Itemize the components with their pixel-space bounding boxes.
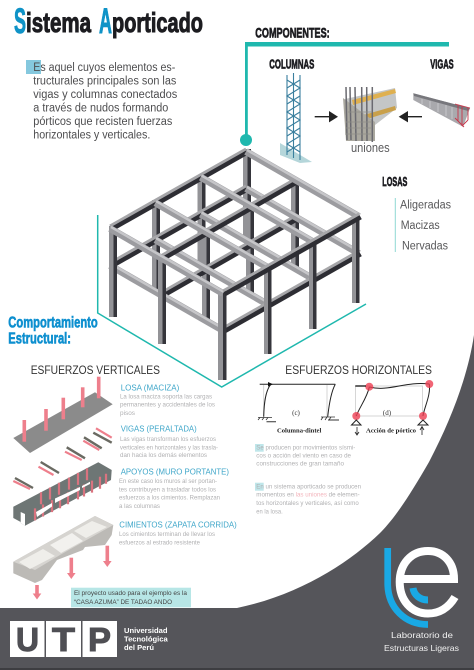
intro paragraph — [26, 60, 178, 142]
teal frame base outline — [98, 215, 366, 387]
diagram: column-lintel frame (c): (c) — [292, 409, 301, 417]
text block: vigas — [120, 425, 218, 459]
lower level beams — [110, 186, 361, 331]
intro paragraph: tructurales principales son las — [33, 76, 177, 88]
university name — [124, 626, 169, 652]
title: porticado — [112, 7, 203, 38]
heading: comportamiento estructural: Comportamiento — [8, 314, 98, 331]
illustration: beams with force arrows — [13, 428, 112, 489]
illustration: slab with load arrows — [13, 377, 113, 453]
teal connector line — [240, 42, 449, 146]
intro paragraph: vigas y columnas conectados — [33, 89, 178, 101]
university name: del Perú — [124, 643, 154, 652]
intro paragraph: Es aquel cuyos elementos es- — [33, 62, 175, 74]
upper level beams — [110, 149, 361, 294]
list: slab types: Aligeradas — [400, 199, 451, 211]
dark swoosh background and footer band — [0, 335, 474, 670]
callout: project note — [71, 588, 191, 607]
callout: project note: El proyecto usado para el ejemplo es la — [74, 590, 187, 597]
isometric portal frame — [109, 149, 361, 380]
text block: horizontal loads origin: construcciones de gran tamaño — [256, 461, 344, 468]
text block: moments at joints: en la losa. — [256, 508, 283, 515]
text block: horizontal loads origin: cos o acción del viento en caso de — [256, 453, 351, 460]
callout: project note: “CASA AZUMA” DE TADAO ANDO — [74, 599, 172, 606]
heading: comportamiento estructural — [8, 314, 98, 347]
logo: UTP — [10, 621, 169, 658]
list: slab types: Macizas — [401, 220, 440, 232]
heading: losas: LOSAS — [382, 174, 407, 189]
title — [14, 2, 203, 41]
text block: losa: permanentes y accidentales de los — [120, 402, 215, 409]
text block: cimientos — [119, 521, 237, 547]
diagram: column-lintel frame (c) — [258, 382, 339, 434]
icon: column rebar tower — [280, 73, 312, 163]
list: slab types — [395, 198, 451, 252]
text block: losa: pisos — [120, 410, 135, 417]
text block: apoyos — [119, 467, 229, 510]
text block: vigas: dan hacia los demás elementos — [120, 452, 207, 459]
logo: laboratorio de estructuras ligeras — [384, 548, 459, 653]
arrow: beam to union — [399, 111, 422, 122]
text block: losa: La losa maciza soporta las cargas — [120, 393, 212, 400]
logo: UTP: P — [88, 621, 111, 658]
diagram: column-lintel frame (c): Columna-dintel — [277, 427, 321, 434]
paragraph highlight square — [26, 60, 41, 74]
text block: apoyos: tes contribuyen a trasladar todos los — [119, 486, 216, 493]
back columns — [152, 149, 299, 319]
text block: cimientos: CIMIENTOS (ZAPATA CORRIDA) — [119, 521, 237, 530]
text block: apoyos: a las columnas — [119, 503, 160, 510]
text block: losa — [120, 383, 215, 417]
illustration: bearing walls — [13, 462, 112, 526]
text block: apoyos: APOYOS (MURO PORTANTE) — [121, 467, 229, 476]
text block: vigas: VIGAS (PERALTADA) — [121, 425, 197, 434]
label: uniones: uniones — [351, 141, 390, 155]
heading: comportamiento estructural: Estructural: — [8, 330, 71, 347]
label: vigas: VIGAS — [430, 56, 454, 71]
text block: apoyos: En este caso los muros al ser portan- — [119, 478, 217, 485]
diagram: portal frame action (d): Acción de pórtico — [366, 427, 417, 434]
label: columnas: COLUMNAS — [269, 56, 314, 71]
logo: UTP: T — [52, 621, 75, 658]
diagram: portal frame action (d): (d) — [383, 409, 392, 417]
university name: Tecnológica — [124, 634, 169, 644]
text block: moments at joints: tos horizontales y verticales, así como — [256, 500, 359, 507]
arrow: column to union — [315, 111, 338, 122]
list: slab types: Nervadas — [402, 240, 448, 252]
text block: horizontal loads origin — [255, 444, 355, 468]
intro paragraph: horizontales y verticales. — [33, 130, 150, 142]
foundation load arrows — [33, 546, 112, 600]
title: A — [99, 2, 112, 41]
diagram: portal frame action (d) — [352, 380, 433, 435]
text block: cimientos: esfuerzos al estrado resistente — [119, 540, 200, 547]
front columns — [109, 214, 360, 380]
heading: componentes: COMPONENTES: — [255, 25, 330, 41]
heading: esfuerzos horizontales: ESFUERZOS HORIZONTALES — [285, 365, 432, 377]
icon: beam rebar — [413, 93, 470, 127]
text block: vigas: verticales en horizontales y las trasla- — [120, 444, 218, 451]
illustration: strip foundation — [13, 516, 113, 600]
text block: moments at joints — [255, 483, 361, 515]
title: istema — [26, 7, 91, 38]
text block: moments at joints: momentos en las uniones de elemen- — [256, 492, 360, 499]
text block: losa: LOSA (MACIZA) — [121, 383, 180, 392]
text block: moments at joints: En un sistema aporticado se producen — [256, 483, 361, 490]
logo: laboratorio de estructuras ligeras: Estructuras Ligeras — [384, 643, 459, 653]
logo: UTP: U — [16, 621, 39, 658]
icon: beam column union — [343, 87, 397, 142]
intro paragraph: a través de nudos formando — [33, 102, 168, 114]
university name: Universidad — [124, 626, 168, 635]
text block: horizontal loads origin: Se producen por movimientos sísmi- — [256, 444, 355, 451]
heading: esfuerzos verticales: ESFUERZOS VERTICALES — [31, 365, 160, 377]
title: S — [14, 2, 26, 41]
text block: apoyos: esfuerzos a los cimientos. Remplazan — [119, 495, 220, 502]
text block: vigas: Las vigas transforman los esfuerzos — [120, 436, 216, 443]
text block: cimientos: Los cimientos terminan de llevar los — [119, 531, 215, 538]
intro paragraph: pórticos que recisten fuerzas — [33, 116, 173, 128]
logo: laboratorio de estructuras ligeras: Laboratorio de — [391, 630, 453, 640]
